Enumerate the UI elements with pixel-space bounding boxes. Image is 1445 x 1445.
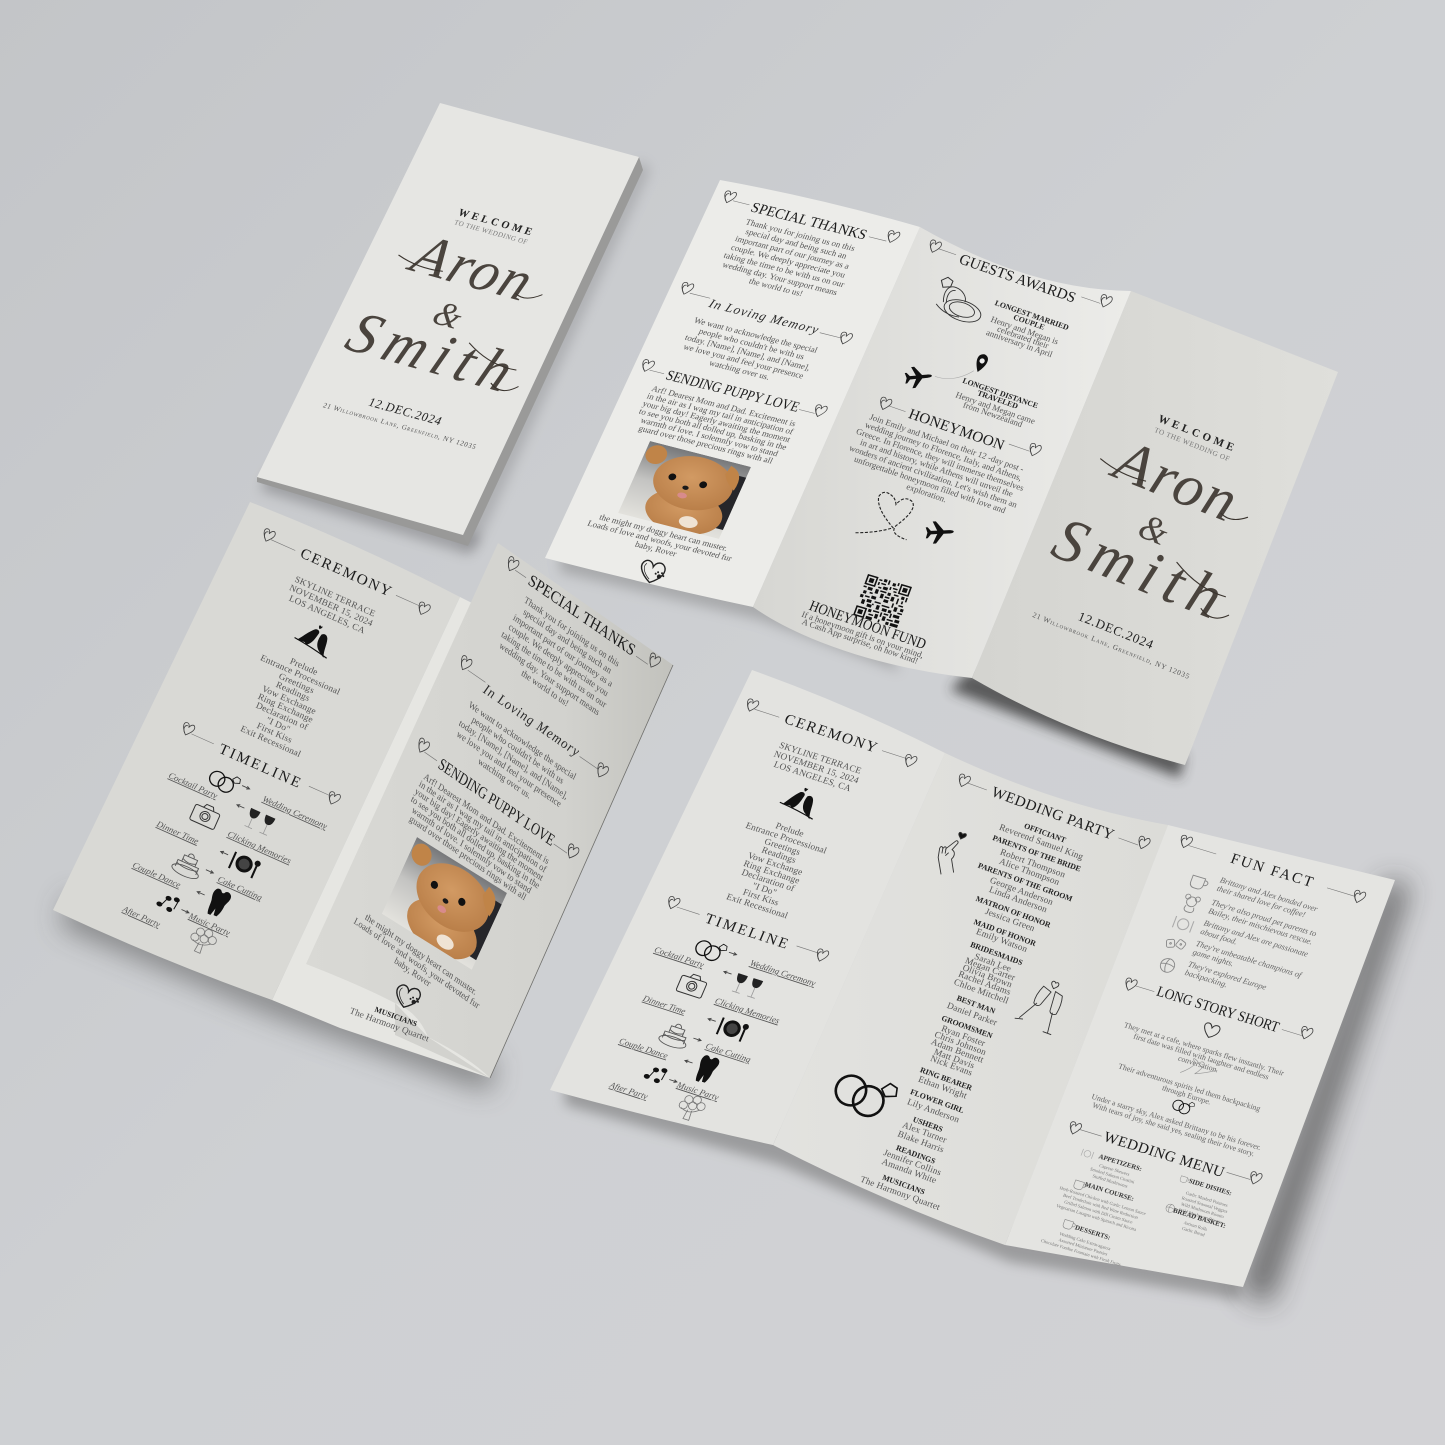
timeline: Cake Cutting [216,874,264,903]
left fold: special thanks: warmth of love. I solemnly vow to stand [639,415,781,458]
icon: pin, plane route [897,332,990,410]
middle fold: guests awards and honeymoon: Henry and Megan came [954,390,1037,426]
left fold: ceremony and timeline: First Kiss [741,887,781,908]
left fold: ceremony and timeline: "I Do" [751,880,778,897]
middle fold: wedding party: FLOWER GIRL [909,1087,965,1115]
menu: APPETIZERS: [1097,1153,1143,1173]
left fold: ceremony and timeline: Ring Exchange [256,691,315,725]
timeline: Couple Dance [131,860,182,890]
menu: Vegetarian Lasagna with Spinach and Ricotta [1056,1203,1137,1232]
left fold: ceremony and timeline: Prelude [288,656,320,677]
flap: special thanks page: the world to us! [520,668,570,709]
left fold: special thanks: In Loving Memory [706,296,823,337]
cover text: Smith [336,299,524,404]
middle fold: guests awards and honeymoon: wonders of ancient civilization. Let's wish them an [848,443,1019,510]
left fold: ceremony and timeline: Vow Exchange [261,683,318,716]
left fold: special thanks: in the air as I wag my tail in anticipation of [645,391,795,436]
timeline [595,925,819,1140]
right fold: cover: 12.DEC.2024 [1076,609,1156,652]
shadows [60,160,1410,1305]
left fold: special thanks: special day and being such an [744,226,849,261]
left fold: ceremony and timeline [53,502,460,1000]
cover text: WELCOME [456,208,537,239]
flap: special thanks page: We want to acknowledge the special [467,699,578,782]
middle fold: wedding party: Reverend Samuel King [998,822,1085,862]
left fold: ceremony and timeline: Vow Exchange [746,850,804,877]
flap: special thanks page [306,543,673,1078]
menu: Stuffed Mushrooms [1092,1173,1129,1189]
middle fold: wedding party: BRIDESMAIDS [969,940,1024,967]
middle fold: guests awards and honeymoon: GUESTS AWARDS [957,252,1078,306]
underlying page text: MUSICIANS [373,1005,419,1028]
middle fold: wedding party: Ethan Wright [917,1074,969,1101]
middle fold: guests awards and honeymoon: unforgettable honeymoon filled with love and [853,454,1008,515]
menu: Garlic Mashed Potatoes [1185,1190,1229,1208]
middle fold: wedding party: GROOMSMEN [940,1014,994,1040]
left fold: special thanks: the might my doggy heart can muster. [598,512,730,553]
flap: special thanks page: guard over those precious rings with all [408,813,528,903]
left fold: ceremony and timeline: First Kiss [255,720,294,745]
flap: special thanks page: your big day! Eagerly awaiting the moment [413,786,545,883]
menu: Wild Mushroom Risotto [1180,1201,1225,1219]
curl shading [395,1003,490,1078]
timeline: Music Party [187,910,232,938]
middle fold: guests awards and honeymoon [753,227,1131,678]
left fold: special thanks: people who couldn't be with us [697,326,807,361]
middle fold: wedding party: Rachel Adams [957,969,1013,997]
left fold: special thanks: today. [Name], [Name], and [Name], [683,332,812,372]
middle fold: wedding party: PARENTS OF THE GROOM [977,861,1074,904]
menu: DESSERTS: [1074,1224,1111,1242]
middle fold: guests awards and honeymoon: If a honeymoon gift is on your mind, [800,609,925,660]
right fold: cover [972,291,1338,765]
left fold: special thanks: to see you both all dolled up, basking in the [637,406,789,452]
middle fold: wedding party: Lily Anderson [906,1096,961,1125]
middle fold: wedding party: Robert Thompson [999,847,1067,880]
flap: special thanks page: special day and being such an [522,606,613,676]
left fold: special thanks: We want to acknowledge the special [692,315,820,355]
middle fold: wedding party: Alice Thompson [998,856,1061,887]
middle fold: wedding party: MAID OF HONOR [972,917,1038,948]
left fold: special thanks: watching over us. [708,358,772,382]
right fold: fun fact, story, menu: Their adventurous spirits led them backpacking [1117,1062,1262,1113]
flap edge [490,665,673,1078]
underlying page text: The Harmony Quartet [348,1006,431,1044]
menu: Grilled Salmon with Dill Cream Sauce [1064,1199,1133,1225]
middle fold: guests awards and honeymoon: wedding journey to Florence, Italy, and Athens, [863,420,1023,483]
icon: paw heart [393,983,423,1011]
left fold: ceremony and timeline: Greetings [763,836,802,857]
middle fold: wedding party: Chris Johnson [933,1029,988,1057]
left fold: ceremony and timeline: Exit Recessional [239,723,303,759]
flap: special thanks page: important part of our journey as a [512,612,614,689]
left fold: ceremony and timeline: Declaration of [254,700,310,732]
left fold: ceremony and timeline: Exit Recessional [725,891,790,921]
left fold: ceremony and timeline: Entrance Processional [744,820,829,856]
timeline: After Party [120,903,162,929]
left fold: special thanks: the world to us! [747,276,805,298]
left fold: ceremony and timeline: TIMELINE [216,741,303,791]
right fold: cover: TO THE WEDDING OF [1153,426,1231,463]
panel: open brochure bottom right [550,670,1395,1297]
cover text: 21 Willowbrook Lane, Greenfield, NY 12035 [322,401,478,451]
left fold: special thanks: we love you and feel your presence [682,342,806,381]
left fold: ceremony and timeline: CEREMONY [782,712,880,756]
middle fold: wedding party: BEST MAN [955,994,997,1016]
right fold: fun fact, story, menu [1005,825,1395,1297]
flap: special thanks page: SENDING PUPPY LOVE [435,755,557,850]
right fold: cover: 21 Willowbrook Lane, Greenfield, NY 12035 [1031,610,1191,681]
cover text [314,195,588,454]
middle fold: wedding party: MATRON OF HONOR [975,894,1052,930]
left fold: special thanks: your big day! Eagerly awaiting the moment [641,398,793,444]
menu: SIDE DISHES: [1187,1178,1233,1197]
menu: Beef Tenderloin with Red Wine Reduction [1062,1193,1139,1220]
left fold: special thanks: important part of our journey as a [734,234,851,271]
middle fold: wedding party: PARENTS OF THE BRIDE [991,833,1082,873]
left fold: ceremony and timeline: CEREMONY [298,546,394,600]
middle fold: guests awards and honeymoon: A Cash App surprise, oh how kind! [800,616,920,666]
left fold: ceremony and timeline: Prelude [774,821,806,839]
middle fold: guests awards and honeymoon: Join Emily and Michael on their 12 -day post - [868,412,1026,474]
photo: puppy [616,441,751,544]
flap: special thanks page: SPECIAL THANKS [525,572,638,660]
middle fold: wedding party: RING BEARER [919,1065,974,1093]
flap: special thanks page: wedding day. Your support means [498,640,602,718]
menu: Caprese Skewers [1099,1163,1131,1177]
middle fold: guests awards and honeymoon: LONGEST MARRIED [993,298,1071,332]
right fold: fun fact, story, menu: LONG STORY SHORT [1154,984,1281,1036]
timeline: Couple Dance [618,1036,670,1061]
right fold: cover: Aron [1102,425,1247,534]
middle fold: guests awards and honeymoon: exploration. [905,481,948,504]
middle fold: guests awards and honeymoon: LONGEST DISTANCE [961,376,1040,410]
middle fold: guests awards and honeymoon: COUPLE [1012,313,1046,332]
menu: Assorted Miniature Pastries [1058,1237,1108,1257]
timeline: Music Party [675,1079,721,1102]
middle fold: guests awards and honeymoon: TRAVELED [976,389,1020,411]
right fold: fun fact, story, menu: Under a starry sky, Alex asked Brittany to be his forever. [1090,1092,1262,1152]
middle fold: guests awards and honeymoon: in art and history, while Athens will unveil the [859,437,1015,499]
flap: special thanks page: Thank you for joining us on this [523,594,621,669]
middle fold: wedding party: Jennifer Collins [882,1147,943,1178]
right fold: cover: Smith [1043,505,1232,632]
panel: folded cover card [257,103,643,546]
middle fold: wedding party: WEDDING PARTY [989,784,1116,843]
flap: special thanks page: In Loving Memory [480,680,583,760]
right fold: fun fact, story, menu: conversation. [1177,1054,1220,1074]
menu: BREAD BASKET: [1172,1207,1227,1230]
right fold: fun fact, story, menu: They're also proud pet parents to [1210,898,1318,938]
middle fold: wedding party: Daniel Parker [946,1000,999,1028]
left fold: ceremony and timeline: LOS ANGELES, CA [288,593,367,636]
middle fold: wedding party: Sarah Lee [973,951,1013,974]
timeline: Cocktail Party [167,770,219,801]
left fold: ceremony and timeline: SKYLINE TERRACE [778,740,863,776]
left fold: ceremony and timeline: NOVEMBER 15, 2024 [772,749,861,785]
middle fold: wedding party: MUSICIANS [881,1173,926,1196]
menu: Garlic Bread [1181,1226,1206,1238]
menu: Smoked Salmon Crostini [1089,1166,1136,1185]
middle fold: wedding party: Megan Carter [964,955,1017,983]
cover text: & [427,295,469,337]
menu [1039,1143,1238,1292]
middle fold: guests awards and honeymoon: celebrated their [996,324,1050,350]
timeline: Clicking Memories [714,996,782,1026]
flap: special thanks page: watching over us. [476,756,533,801]
right fold: fun fact, story, menu: their shared love for coffee! [1215,884,1307,919]
flap: special thanks page: to see you both all dolled up, basking in the [409,793,541,891]
middle fold: wedding party: Alex Turner [901,1120,948,1145]
middle fold: wedding party: Blake Harris [896,1129,946,1155]
left fold: special thanks: taking the time to be with us on our [722,250,846,289]
middle fold: wedding party: USHERS [912,1115,944,1134]
right fold: fun fact, story, menu: Brittany and Alex are passionate [1202,919,1310,959]
menu: Artisan Rolls [1183,1220,1208,1232]
flap: special thanks page: baby, Rover [393,955,432,989]
flap: special thanks page: we love you and feel your presence [455,728,563,809]
middle fold: wedding party: The Harmony Quartet [859,1174,942,1212]
timeline: After Party [607,1079,650,1101]
right fold: fun fact, story, menu: backpacking. [1184,968,1229,989]
menu: Chocolate Fondue Fountain with Fresh Fruits [1040,1238,1122,1267]
left fold: special thanks: baby, Rover [634,539,679,558]
flap: special thanks page: Arf! Dearest Mom and Dad. Excitement is [422,771,551,866]
left fold: ceremony and timeline: Greetings [277,671,316,695]
left fold: special thanks: SENDING PUPPY LOVE [663,368,802,416]
left fold: special thanks: Loads of love and woofs, your devoted fur [586,518,734,563]
icon: paw heart [638,559,667,586]
middle fold: wedding party: Amanda White [880,1156,938,1185]
panel: half-open brochure bottom left [53,502,673,1078]
flap: special thanks page: today. [Name], [Name], and [Name], [457,718,570,801]
right fold: cover: WELCOME [1156,413,1239,455]
left fold: special thanks: SPECIAL THANKS [748,200,869,243]
right fold: fun fact, story, menu: They're unbeatable champions of [1195,939,1304,980]
middle fold: wedding party: Emily Watson [975,926,1029,954]
left fold: special thanks: Thank you for joining us on this [744,217,857,253]
cover text: Aron [398,223,543,313]
middle fold: wedding party: READINGS [895,1143,937,1166]
menu: Herb-Roasted Chicken with Garlic Lemon Sauce [1059,1185,1147,1216]
flap: special thanks page: in the air as I wag my tail in anticipation of [418,778,549,875]
right fold: cover: & [1133,506,1174,553]
cover text: TO THE WEDDING OF [453,219,529,246]
middle fold: wedding party: Matt Davis [932,1047,976,1070]
right fold: fun fact, story, menu: FUN FACT [1228,851,1315,891]
middle fold: guests awards and honeymoon: Greece. In Florence, they will immerse themselves [855,426,1026,493]
left fold: ceremony and timeline: "I Do" [265,715,292,734]
icon: rings with diamond [929,276,991,326]
middle fold: wedding party: Adam Bennett [930,1037,986,1065]
right fold: fun fact, story, menu: They're explored Europe [1187,960,1268,992]
icon: love birds [777,782,824,820]
panel: open brochure top [545,180,1338,765]
menu: Wedding Cake Extravaganza [1059,1231,1111,1251]
middle fold: guests awards and honeymoon: from Newzealand [962,400,1025,429]
timeline: Wedding Ceremony [748,958,817,988]
right fold: fun fact, story, menu: through Europe. [1161,1083,1212,1106]
middle fold: wedding party: Ryan Foster [940,1023,987,1048]
left fold: special thanks: couple. We deeply appreciate you [729,242,848,280]
timeline: Clicking Memories [226,829,293,866]
timeline: Cake Cutting [704,1041,753,1065]
timeline: Dinner Time [154,818,200,846]
menu: MAIN COURSE: [1083,1182,1135,1203]
middle fold: wedding party: OFFICIANT [1023,821,1068,845]
middle fold: guests awards and honeymoon: HONEYMOON [906,406,1007,454]
right fold: fun fact, story, menu: Bailey, their mischievous rescue. [1207,906,1314,947]
middle fold: guests awards and honeymoon: Henry and Megan is [989,314,1061,347]
flap: special thanks page: couple. We deeply appreciate you [507,621,610,699]
left fold: ceremony and timeline: Ring Exchange [742,858,802,886]
right fold: fun fact, story, menu: Brittany and Alex bonded over [1219,876,1320,914]
left fold: special thanks: guard over those precious rings with all [637,423,775,466]
middle fold: wedding party: Olivia Brown [961,962,1014,989]
left fold: ceremony and timeline: LOS ANGELES, CA [772,759,853,793]
qr code [853,574,912,628]
right fold: fun fact, story, menu: about food. [1199,927,1238,946]
middle fold: wedding party: Linda Anderson [988,884,1049,914]
left fold: ceremony and timeline: Readings [274,679,312,703]
left fold: ceremony and timeline: Declaration of [740,867,797,894]
right fold: fun fact, story, menu: They met at a cafe, where sparks flew instantly. Their [1123,1020,1286,1078]
icon: dashed heart flight [855,487,964,564]
timeline: Cocktail Party [653,944,706,970]
timeline: Wedding Ceremony [261,794,329,831]
middle fold: guests awards and honeymoon: anniversary in April [985,327,1055,359]
menu: Roasted Seasonal Veggies [1181,1195,1229,1214]
timeline [108,751,331,980]
right fold: fun fact, story, menu: game nights. [1191,948,1235,968]
left fold: ceremony and timeline: NOVEMBER 15, 2024 [288,582,375,628]
middle fold: wedding party: George Anderson [988,875,1055,907]
right fold: fun fact, story, menu: With tears of joy, she said yes, sealing their love story. [1091,1101,1256,1158]
left fold: ceremony and timeline: Entrance Processional [259,653,342,697]
menu: Wild Mushroom Risotto [1178,1207,1223,1225]
left fold: ceremony and timeline: TIMELINE [702,911,790,952]
middle fold: wedding party [773,753,1168,1245]
left fold: special thanks [545,180,920,607]
left fold: special thanks: wedding day. Your support means [721,260,840,297]
flap: special thanks page: Loads of love and woofs, your devoted fur [352,915,481,1011]
flap: special thanks page: taking the time to be with us on our [500,629,608,710]
left fold: ceremony and timeline: Readings [760,845,798,865]
cover text: 12.DEC.2024 [366,395,445,428]
middle fold: guests awards and honeymoon: HONEYMOON FUND [807,598,928,653]
right fold: fun fact, story, menu: first date was filled with laughter and endless [1132,1032,1270,1081]
right fold: fun fact, story, menu: WEDDING MENU [1101,1129,1226,1181]
under page [272,597,560,1078]
flap: special thanks page: people who couldn't be with us [470,714,566,786]
left fold: special thanks: Arf! Dearest Mom and Dad. Excitement is [650,383,798,428]
left fold: ceremony and timeline: SKYLINE TERRACE [293,574,377,619]
photo: puppy [380,837,507,975]
timeline: Dinner Time [640,993,687,1016]
middle fold: wedding party: Nick Evans [929,1053,974,1078]
icon: love birds [292,618,338,659]
middle fold: wedding party: Jessica Green [984,906,1037,933]
left fold: ceremony and timeline [550,670,945,1145]
middle fold: wedding party: Chloe Mitchell [953,977,1011,1006]
flap: special thanks page: warmth of love. I solemnly vow to stand [410,804,533,896]
flap: special thanks page: the might my doggy heart can muster. [364,911,479,997]
